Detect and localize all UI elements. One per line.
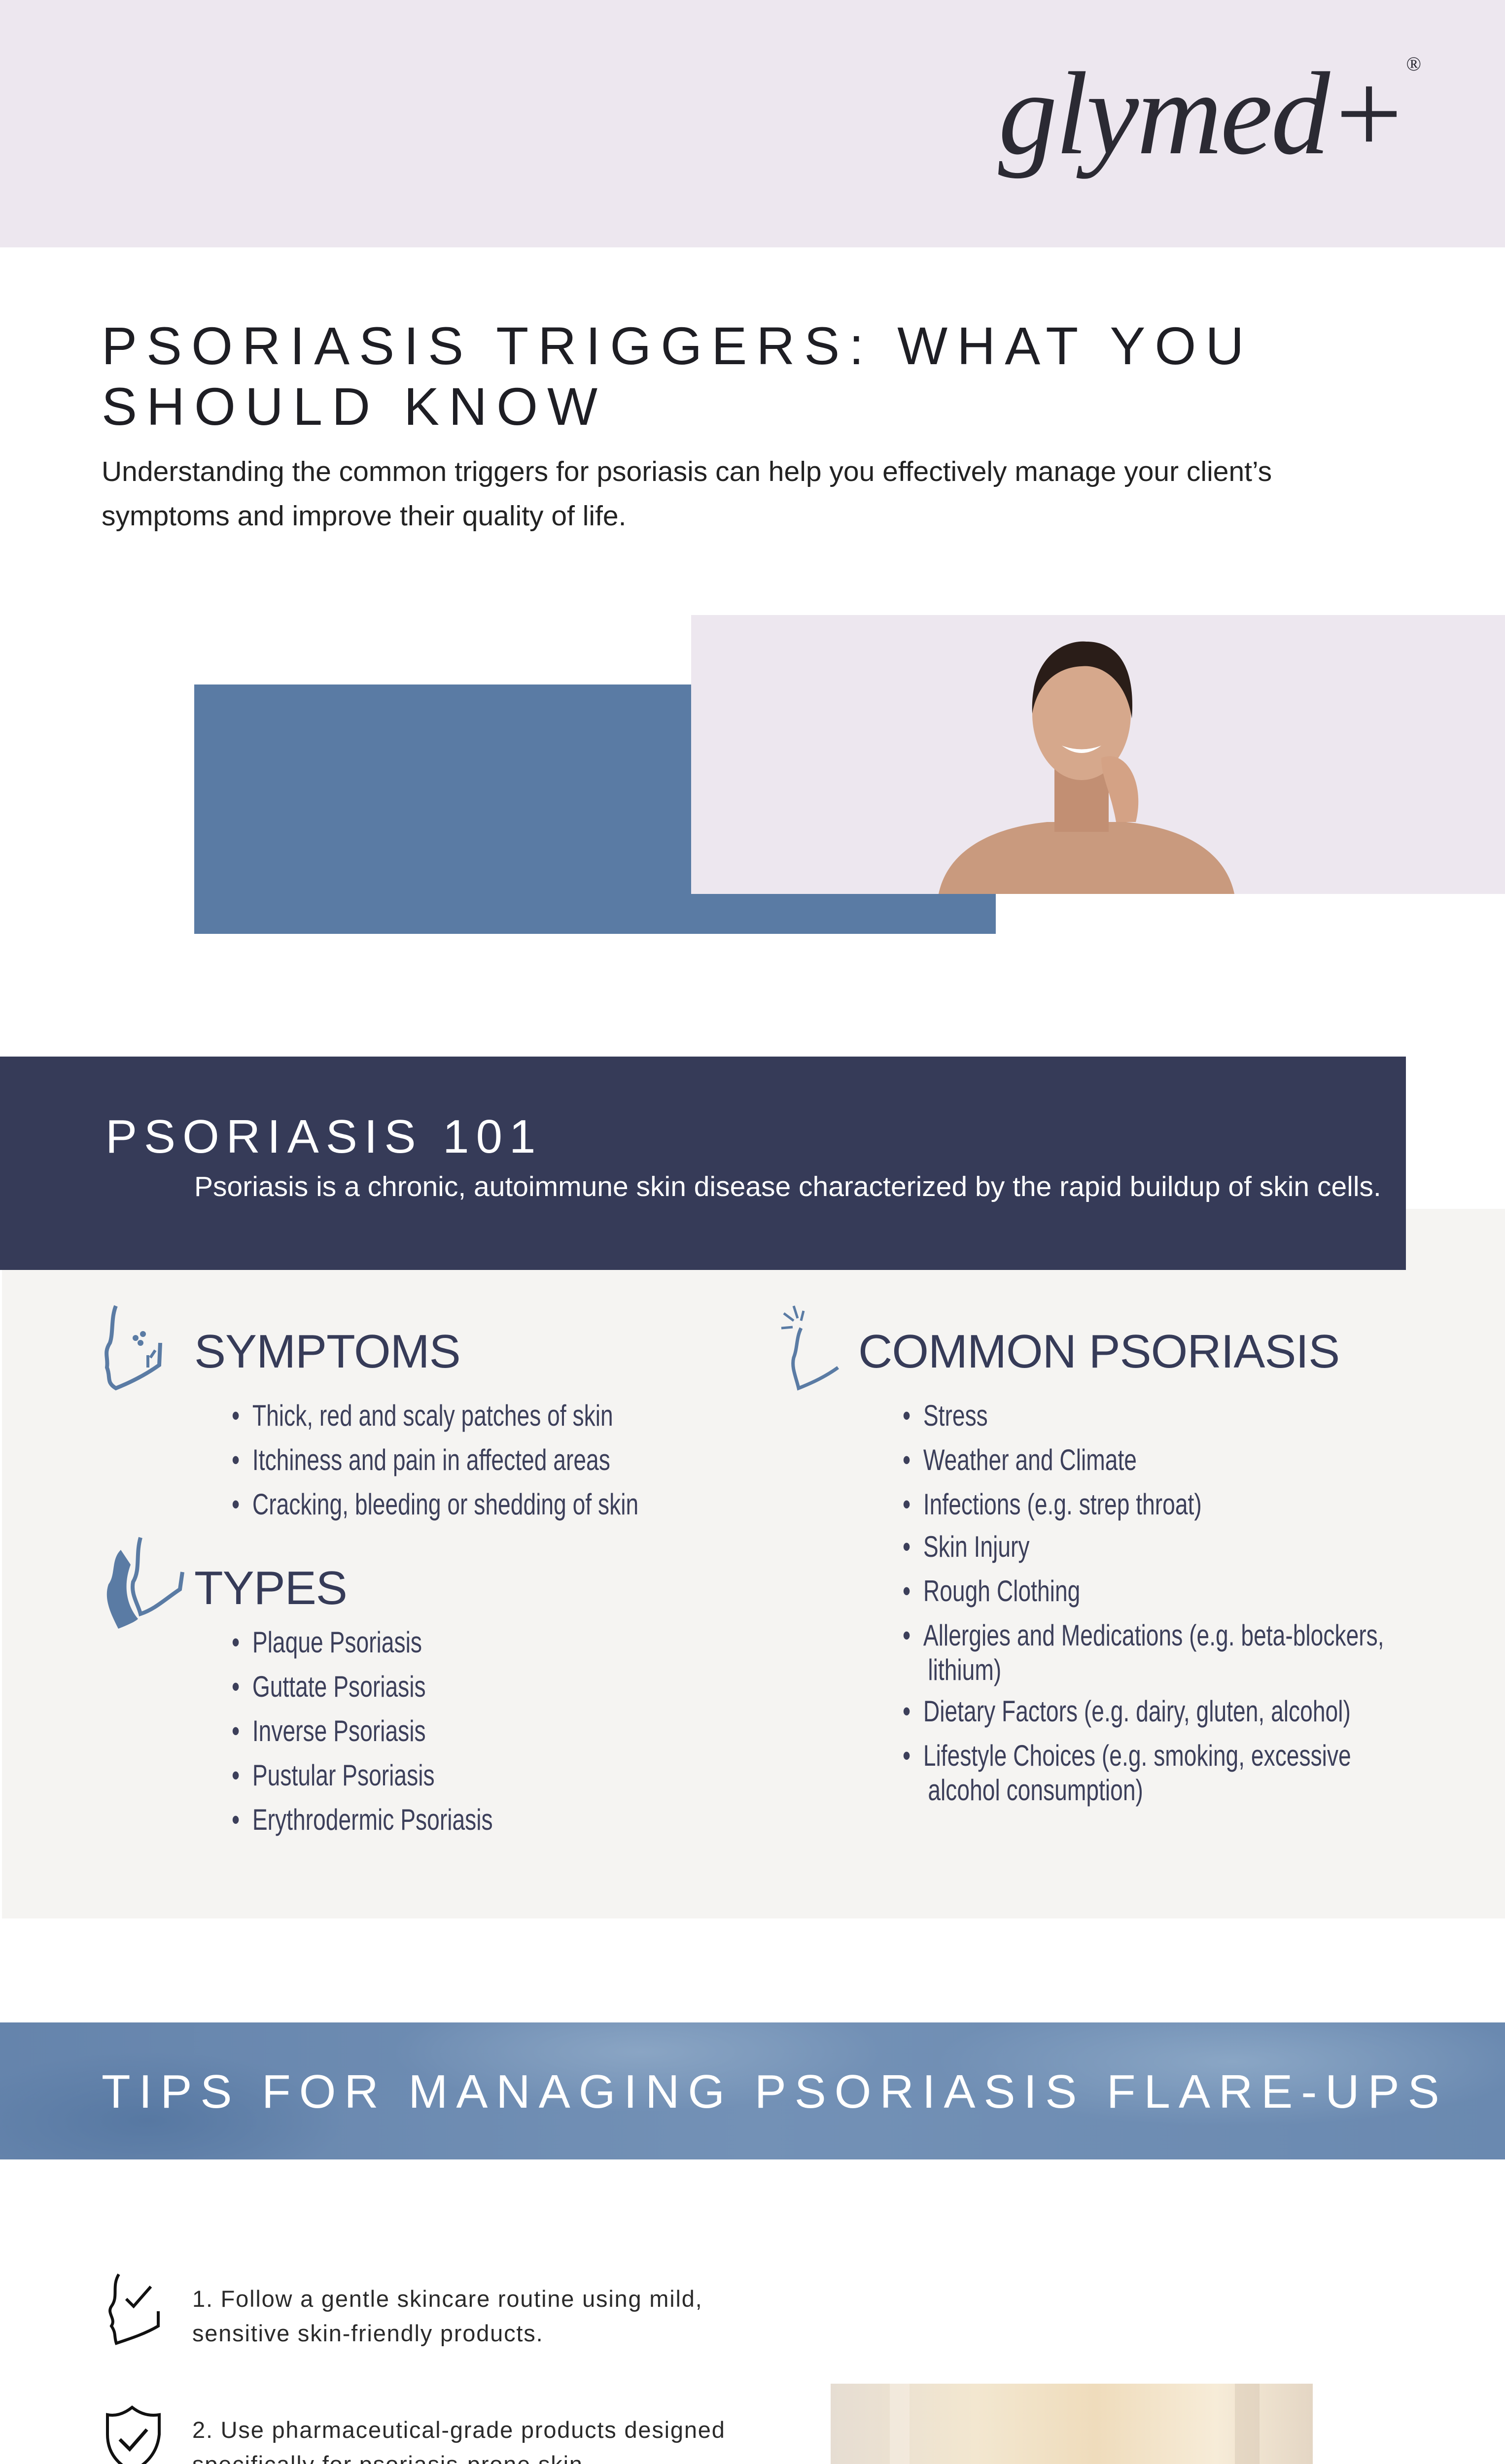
icon: common psoriasis face [781,1305,839,1391]
heading: types: TYPES [194,1562,347,1614]
tip 2 [99,2405,838,2464]
photo: hand [831,2384,1313,2464]
photo: woman [939,642,1234,894]
heading: common psoriasis: COMMON PSORIASIS [858,1325,1339,1378]
list: common triggers: • Weather and Climate [903,1443,1137,1476]
icon: face check [102,2272,166,2346]
text [192,2413,726,2464]
list: common triggers: • Lifestyle Choices (e.g. smoking, excessive [903,1739,1351,1772]
list: common triggers: lithium) [928,1653,1001,1686]
list: common triggers: • Dietary Factors (e.g. dairy, gluten, alcohol) [903,1695,1351,1728]
dark band: psoriasis 101 [0,1057,1406,1270]
intro text [102,456,1272,532]
blue rectangle [194,684,996,934]
text: 1. Follow a gentle skincare routine using mild, [192,2286,703,2312]
list: common triggers [903,1399,1384,1807]
list: types: • Guttate Psoriasis [232,1670,426,1703]
panel: info [2,1270,1505,1918]
icon: types faces [106,1537,184,1629]
tip 1 [108,2274,703,2346]
tips band [0,2022,1505,2159]
list: symptoms: • Cracking, bleeding or shedding of skin [232,1488,638,1521]
list: types: • Pustular Psoriasis [232,1759,435,1792]
description: Psoriasis is a chronic, autoimmune skin disease characterized by the rapid buildup of skin cells. [194,1171,1381,1202]
list: symptoms [232,1399,638,1521]
icon: shield check [103,2405,167,2464]
list: symptoms: • Itchiness and pain in affected areas [232,1443,610,1476]
list: common triggers: • Infections (e.g. strep throat) [903,1488,1202,1521]
list: common triggers: • Stress [903,1399,988,1432]
icon: symptoms face [105,1305,162,1391]
list: types: • Plaque Psoriasis [232,1626,422,1659]
list: types [232,1626,493,1836]
title: PSORIASIS TRIGGERS: WHAT YOU [102,316,1253,376]
tips heading: TIPS FOR MANAGING PSORIASIS FLARE-UPS [102,2065,1448,2118]
text: sensitive skin-friendly products. [192,2320,543,2346]
intro text: Understanding the common triggers for psoriasis can help you effectively manage your client’s [102,456,1272,487]
intro text: symptoms and improve their quality of life. [102,500,626,532]
text [192,2282,703,2351]
heading: PSORIASIS 101 [105,1110,542,1163]
title [102,316,1253,436]
title: SHOULD KNOW [102,376,607,436]
list: common triggers: • Allergies and Medications (e.g. beta-blockers, [903,1619,1384,1652]
logo: glymed+® [998,48,1419,179]
heading: symptoms: SYMPTOMS [194,1325,460,1378]
list: common triggers: alcohol consumption) [928,1774,1143,1807]
text: 2. Use pharmaceutical-grade products designed [192,2417,726,2443]
list: common triggers: • Skin Injury [903,1530,1030,1563]
list: symptoms: • Thick, red and scaly patches of skin [232,1399,613,1432]
list: types: • Erythrodermic Psoriasis [232,1803,493,1836]
list: types: • Inverse Psoriasis [232,1714,426,1747]
header band [0,0,1505,247]
lavender rectangle [691,615,1505,894]
hero image block [194,615,1505,934]
list: common triggers: • Rough Clothing [903,1574,1080,1608]
